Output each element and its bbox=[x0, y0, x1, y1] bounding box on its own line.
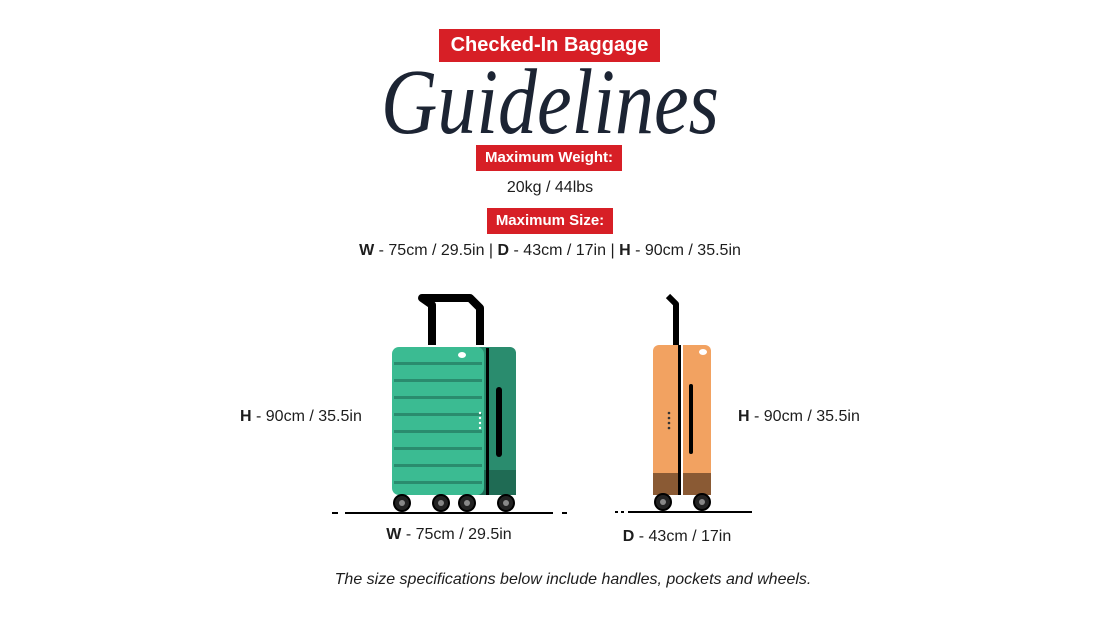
text: size dims: W - 75cm / 29.5in | D - 43cm / 17in | H - 90cm / 35.5in bbox=[359, 242, 741, 259]
badge: Maximum Size bbox=[487, 208, 613, 234]
badge: Maximum Weight bbox=[476, 145, 622, 171]
label: depth: D - 43cm / 17in bbox=[623, 528, 731, 545]
heading badge: Checked-In Baggage bbox=[439, 29, 660, 62]
label: width: W - 75cm / 29.5in bbox=[386, 526, 512, 543]
badge: Maximum Weight: Maximum Weight: bbox=[485, 149, 613, 166]
label: height right: H - 90cm / 35.5in bbox=[738, 408, 860, 425]
text: weight value: 20kg / 44lbs bbox=[507, 179, 593, 196]
badge: Maximum Size: Maximum Size: bbox=[496, 212, 604, 229]
title: Guidelines: Guidelines bbox=[381, 49, 719, 154]
footnote: The size specifications below include handles, pockets and wheels. bbox=[335, 571, 811, 588]
orange suitcase bbox=[615, 296, 752, 512]
heading badge: Checked-In Baggage: Checked-In Baggage bbox=[451, 34, 648, 56]
label: height left: H - 90cm / 35.5in bbox=[240, 408, 362, 425]
green suitcase bbox=[332, 298, 567, 513]
